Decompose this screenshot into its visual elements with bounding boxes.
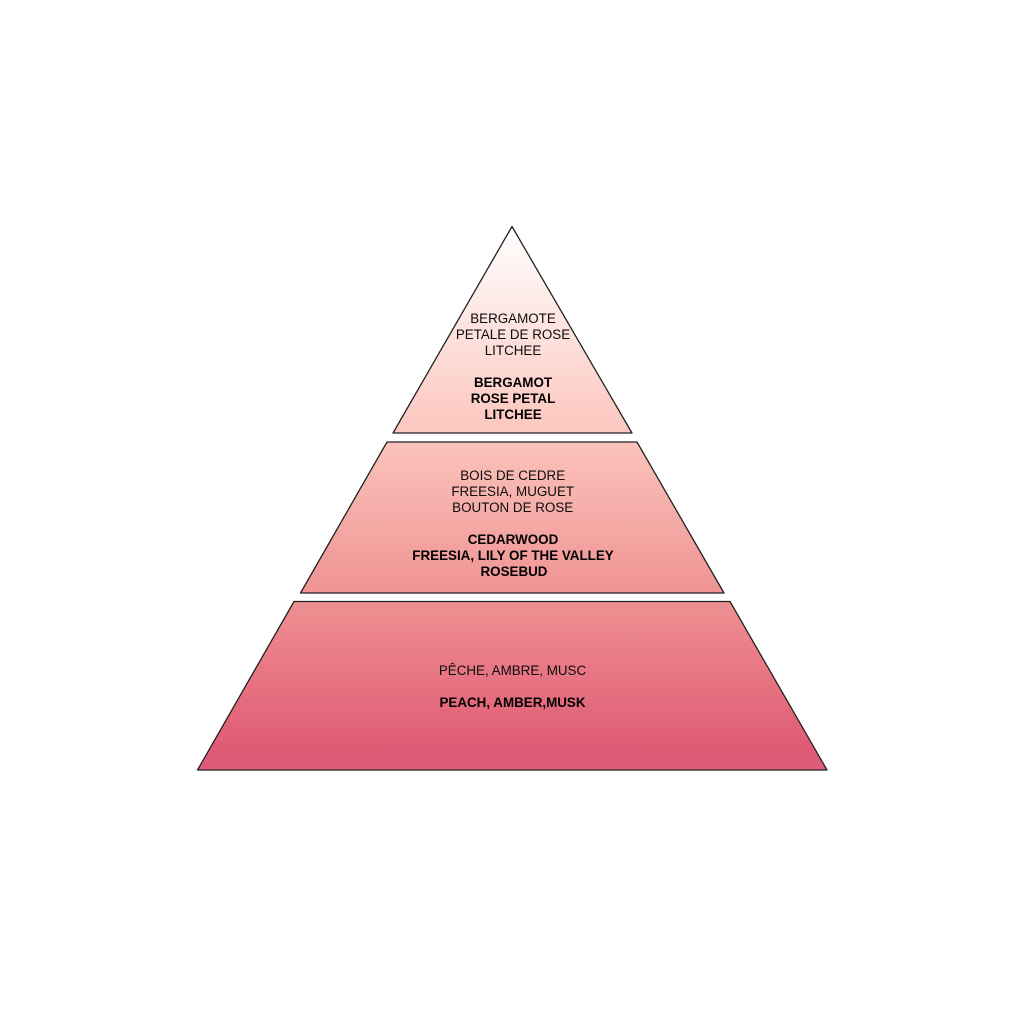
- top notes French text: BERGAMOTE: [470, 311, 556, 326]
- bottom tier trapezoid: [198, 602, 827, 770]
- panel: heart notes: [300, 442, 724, 593]
- heart notes English text: ROSEBUD: [481, 564, 548, 579]
- panel: top notes: [393, 226, 632, 433]
- heart notes French text: [451, 468, 574, 515]
- heart notes English text: [412, 532, 614, 579]
- panel: base notes: [198, 602, 827, 770]
- top notes English text: [471, 375, 555, 422]
- base notes English text: PEACH, AMBER,MUSK: [439, 695, 586, 710]
- top notes English text: BERGAMOT: [474, 375, 553, 390]
- heart notes French text: FREESIA, MUGUET: [451, 484, 574, 499]
- heart notes French text: BOUTON DE ROSE: [452, 500, 573, 515]
- base notes French text: PÊCHE, AMBRE, MUSC: [439, 663, 586, 678]
- top notes French text: LITCHEE: [485, 343, 541, 358]
- top notes French text: PETALE DE ROSE: [456, 327, 570, 342]
- top notes French text: [456, 311, 570, 358]
- top notes English text: LITCHEE: [484, 407, 542, 422]
- heart notes English text: CEDARWOOD: [468, 532, 559, 547]
- top tier triangle: [393, 226, 632, 433]
- heart notes English text: FREESIA, LILY OF THE VALLEY: [412, 548, 614, 563]
- top notes English text: ROSE PETAL: [471, 391, 555, 406]
- middle tier trapezoid: [300, 442, 724, 593]
- heart notes French text: BOIS DE CEDRE: [460, 468, 565, 483]
